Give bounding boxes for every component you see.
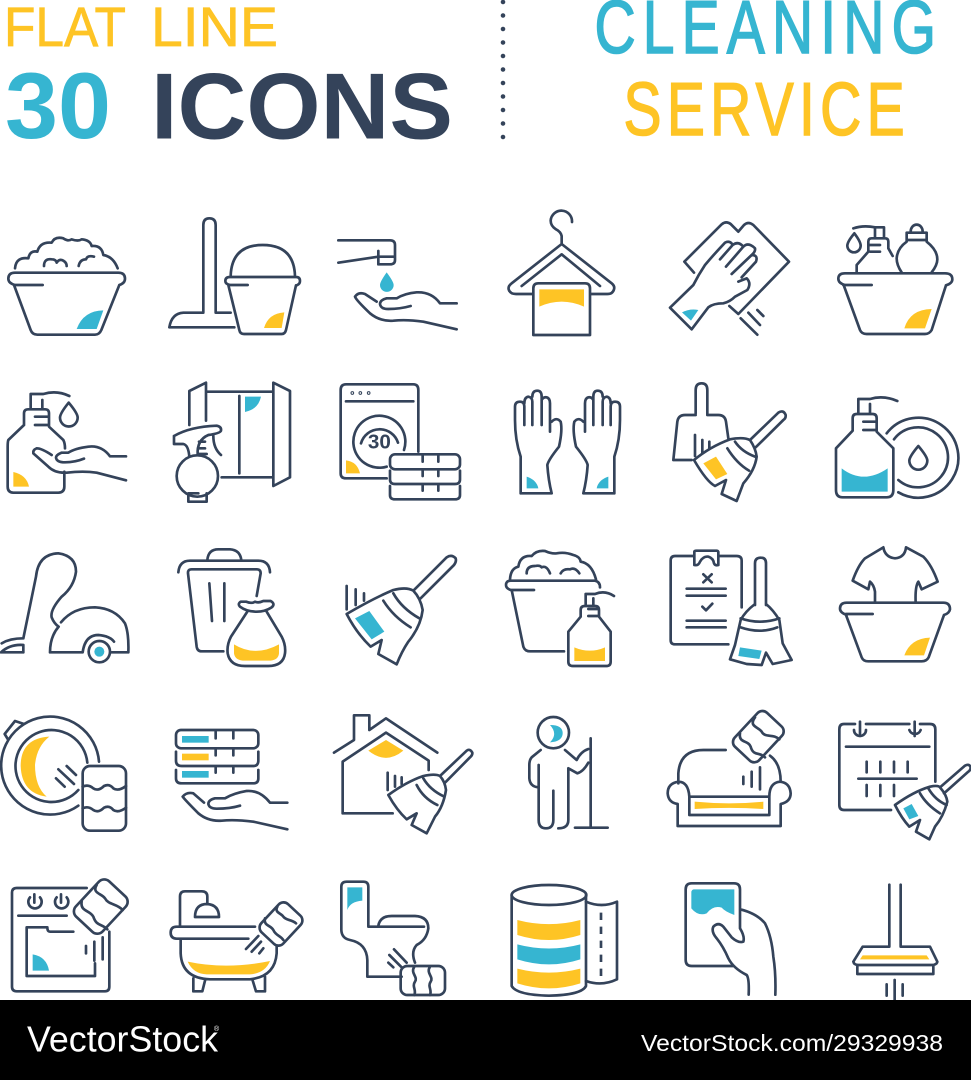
icon: dustpan and broom bbox=[673, 383, 786, 501]
icon: paper towel roll bbox=[512, 885, 617, 996]
icon: hand with cloth bbox=[686, 883, 775, 995]
icon: trash can and bag bbox=[178, 549, 285, 666]
glove: right bbox=[574, 391, 620, 493]
icons: rows 1-2 left bbox=[8, 218, 460, 502]
heading: 30: 30 bbox=[5, 53, 111, 158]
icon: soap bottle and hand bbox=[8, 392, 126, 493]
icons: row 5 left bbox=[12, 876, 445, 995]
icon: towels on hand bbox=[176, 730, 287, 829]
divider: dotted line bbox=[501, 2, 505, 138]
icon: calendar and broom bbox=[839, 722, 971, 839]
icon: checklist and broom bbox=[671, 551, 792, 665]
icon: washing machine and towels bbox=[341, 384, 460, 499]
footer: image url: VectorStock.com/29329938 bbox=[641, 1030, 943, 1056]
icons: row 5 right bbox=[512, 883, 937, 1000]
footer bar bbox=[0, 1000, 971, 1080]
icon: shirt in basin bbox=[840, 547, 950, 661]
icon: mop and bucket bbox=[169, 218, 300, 334]
heading: icons: ICONS bbox=[151, 54, 453, 158]
heading: flat line bbox=[4, 0, 278, 58]
icon: tap and hand bbox=[338, 240, 457, 329]
icon: rubber gloves bbox=[515, 391, 620, 493]
glove: left bbox=[515, 391, 561, 493]
heading: service: SERVICE bbox=[624, 69, 910, 152]
icons: rows 3-4 right bbox=[506, 547, 971, 839]
icon: dish and sponge bbox=[1, 717, 126, 831]
icon: hanger and towel bbox=[509, 211, 614, 335]
icons: rows 3-4 left bbox=[1, 549, 472, 833]
icon: foam basin bbox=[8, 238, 125, 335]
icon: broom bbox=[347, 556, 456, 664]
footer: registered mark: ® bbox=[214, 1025, 220, 1033]
icon: toilet and sponge bbox=[341, 882, 445, 995]
icon: oven and sponge bbox=[12, 876, 131, 991]
icon: squeegee bbox=[853, 885, 937, 1000]
icon: gloved hand wiping bbox=[670, 222, 789, 335]
icon: bathtub and sponge bbox=[171, 891, 305, 991]
icon: basin with bottles bbox=[838, 225, 952, 334]
icons: rows 1-2 right bbox=[509, 211, 958, 501]
icon: soap and plate bbox=[836, 397, 958, 498]
icon: window and spray bbox=[174, 383, 290, 502]
icon: sofa and sponge bbox=[668, 708, 791, 826]
icon: foam bucket and bottle bbox=[506, 551, 614, 666]
icon: vacuum cleaner bbox=[1, 553, 128, 662]
icon: cleaner with mop bbox=[529, 717, 608, 828]
footer: brand: VectorStock bbox=[27, 1018, 219, 1060]
icon: house and broom bbox=[334, 715, 472, 833]
icon: washing machine and towels: 30 bbox=[368, 431, 391, 454]
